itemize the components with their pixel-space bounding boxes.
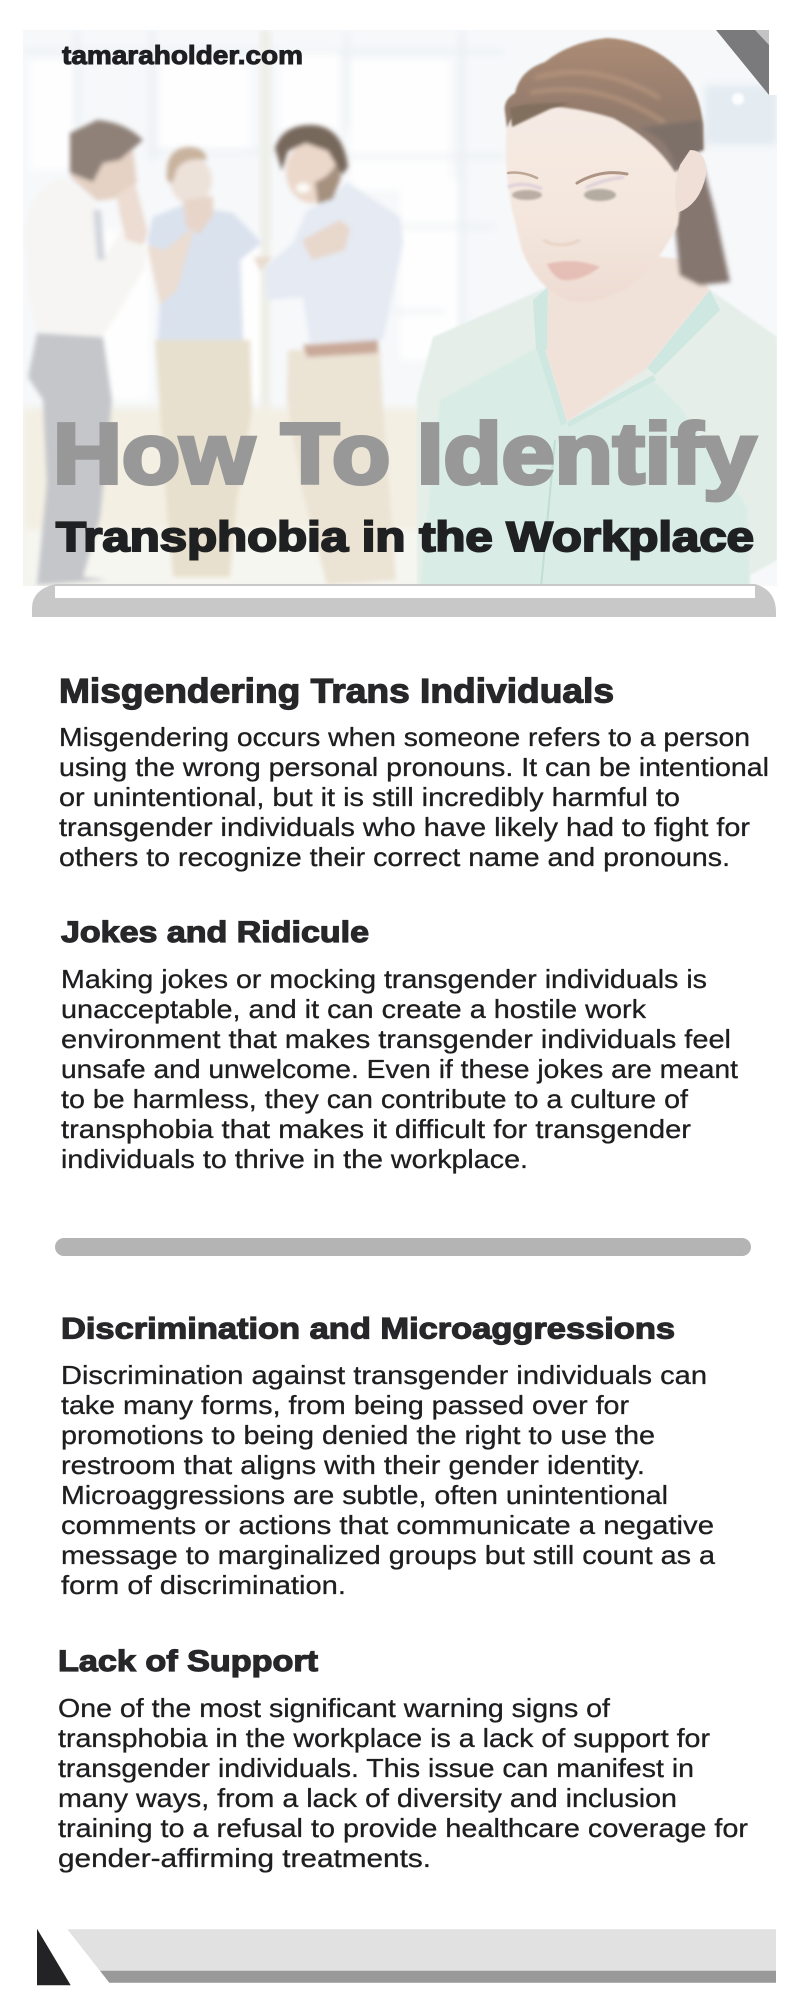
man on the left: [25, 120, 148, 585]
body: discrimination: message to marginalized groups but still count as a: [61, 1540, 716, 1570]
body: jokes: [61, 964, 739, 1174]
divider bar: [55, 1238, 751, 1256]
footer band: [37, 1929, 776, 1985]
body: lack of support: many ways, from a lack of diversity and inclusion: [58, 1783, 677, 1813]
body: jokes: unsafe and unwelcome. Even if these jokes are meant: [61, 1054, 739, 1084]
body: discrimination: promotions to being denied the right to use the: [61, 1420, 655, 1450]
body: jokes: Making jokes or mocking transgender individuals is: [61, 964, 707, 994]
section: lack of support: [58, 1645, 748, 1873]
body: misgendering: [59, 722, 769, 872]
body: discrimination: form of discrimination.: [61, 1570, 346, 1600]
section: misgendering: [59, 672, 769, 872]
body: jokes: to be harmless, they can contribute to a culture of: [61, 1084, 689, 1114]
man on the right: [265, 125, 403, 585]
body: misgendering: Misgendering occurs when someone refers to a person: [59, 722, 750, 752]
heading: jokes: Jokes and Ridicule: [61, 916, 369, 949]
hero photo: office scene: [23, 30, 777, 587]
woman in foreground: [417, 38, 777, 587]
body: lack of support: transgender individuals. This issue can manifest in: [58, 1753, 694, 1783]
title: how to identify: How To Identify: [53, 407, 756, 502]
body: lack of support: training to a refusal to provide healthcare coverage for: [58, 1813, 748, 1843]
body: misgendering: transgender individuals who have likely had to fight for: [59, 812, 750, 842]
heading: discrimination: Discrimination and Microaggressions: [61, 1312, 675, 1346]
body: misgendering: others to recognize their correct name and pronouns.: [59, 842, 730, 872]
body: lack of support: gender-affirming treatments.: [58, 1843, 431, 1873]
hair: [505, 38, 703, 172]
title: transphobia in the workplace: Transphobia in the Workplace: [56, 513, 754, 560]
body: discrimination: restroom that aligns with their gender identity.: [61, 1450, 645, 1480]
body: discrimination: [61, 1360, 716, 1600]
woman in the middle: [147, 147, 273, 577]
hero base bar: [32, 584, 776, 617]
loose hair behind the ear: [675, 162, 730, 285]
body: discrimination: take many forms, from being passed over for: [61, 1390, 629, 1420]
section: discrimination: [61, 1312, 716, 1600]
body: discrimination: Microaggressions are subtle, often unintentional: [61, 1480, 668, 1510]
body: jokes: transphobia that makes it difficult for transgender: [61, 1114, 691, 1144]
face: [506, 104, 682, 302]
body: jokes: individuals to thrive in the workplace.: [61, 1144, 528, 1174]
body: lack of support: transphobia in the workplace is a lack of support for: [58, 1723, 710, 1753]
heading: misgendering: Misgendering Trans Individuals: [59, 672, 614, 710]
body: discrimination: Discrimination against transgender individuals can: [61, 1360, 707, 1390]
body: misgendering: using the wrong personal pronouns. It can be intentional: [59, 752, 769, 782]
body: jokes: environment that makes transgender individuals feel: [61, 1024, 731, 1054]
heading: lack of support: Lack of Support: [58, 1645, 318, 1678]
body: lack of support: [58, 1693, 748, 1873]
body: lack of support: One of the most significant warning signs of: [58, 1693, 611, 1723]
corner ribbon: [716, 30, 769, 95]
section: jokes: [61, 916, 739, 1174]
body: jokes: unacceptable, and it can create a hostile work: [61, 994, 647, 1024]
ear: [675, 150, 706, 213]
site name: tamaraholder.com: [62, 40, 303, 70]
body: misgendering: or unintentional, but it is still incredibly harmful to: [59, 782, 680, 812]
body: discrimination: comments or actions that communicate a negative: [61, 1510, 714, 1540]
